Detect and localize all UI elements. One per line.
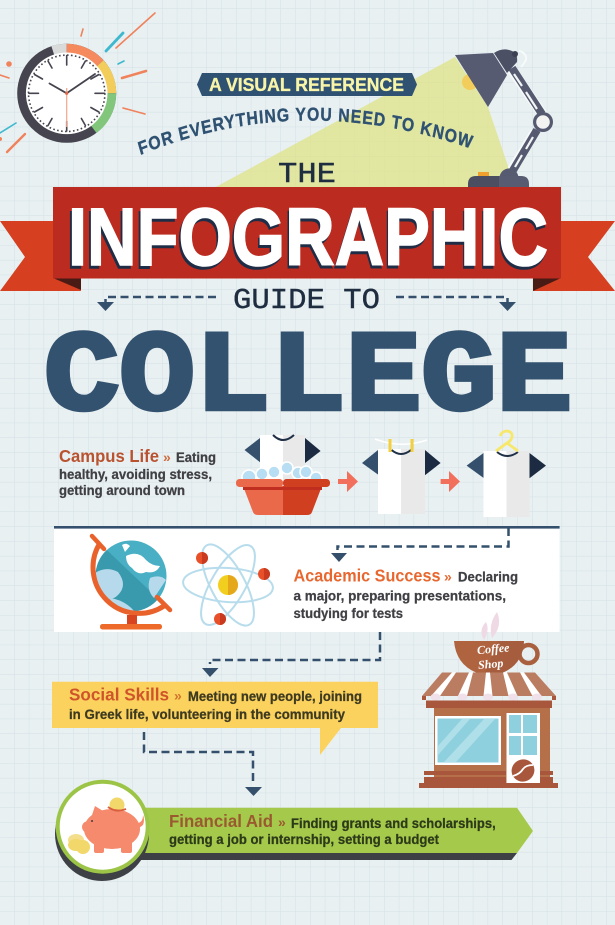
ribbon banner	[0, 187, 615, 291]
pill: a visual reference: A VISUAL REFERENCE	[209, 75, 404, 95]
text: academic success: Academic Success	[294, 566, 441, 586]
panel: social skills callout: »	[174, 688, 182, 704]
text: financial aid	[169, 811, 496, 847]
text: campus life: getting around town	[59, 483, 185, 498]
panel: social skills callout	[52, 682, 378, 755]
arrow: right dashed	[396, 297, 516, 311]
icon: shirt in wash basin	[236, 435, 330, 515]
icon: desk lamp	[455, 49, 553, 188]
panel: social skills callout: Social Skills	[69, 685, 169, 705]
panel: academic success	[54, 526, 560, 633]
heading: college: COLLEGE	[44, 315, 572, 444]
arrow: wash to dry	[338, 471, 358, 492]
text: academic success: »	[444, 568, 452, 584]
arrow: to social skills	[202, 632, 380, 677]
text: campus life: »	[163, 449, 171, 465]
arrow: dry to hanger	[441, 471, 460, 492]
icon: globe	[90, 536, 170, 630]
icon: shirt on hanger	[467, 431, 546, 517]
text: campus life	[59, 446, 216, 498]
text: academic success	[294, 566, 518, 621]
icon: piggy bank	[68, 798, 144, 854]
text: campus life: Campus Life	[59, 446, 159, 466]
panel: social skills callout: in Greek life, volunteering in the community	[69, 707, 345, 722]
text: campus life: healthy, avoiding stress,	[59, 467, 212, 482]
text: financial aid: getting a job or internship, setting a budget	[169, 832, 439, 847]
text: campus life: Eating	[176, 450, 216, 465]
panel: social skills callout: Meeting new people, joining	[188, 689, 362, 704]
icon: coffee shop: Coffee	[476, 640, 511, 657]
icon: coffee shop	[419, 612, 558, 788]
icon: clock	[0, 13, 155, 152]
text: financial aid: Finding grants and scholarships,	[291, 816, 496, 831]
arrow: to financial aid	[144, 732, 262, 796]
curved subtitle: FOR EVERYTHING YOU NEED TO KNOW	[138, 107, 474, 155]
lamp light cone	[214, 57, 510, 188]
arrow: to academic text	[331, 528, 508, 562]
text: academic success: studying for tests	[294, 606, 403, 621]
heading: guide to: GUIDE TO	[233, 284, 380, 317]
arrow: left dashed	[97, 297, 216, 311]
heading: the: THE	[278, 158, 336, 191]
text: financial aid: Financial Aid	[169, 811, 273, 831]
panel: financial aid	[55, 780, 533, 881]
icon: shirt on clothesline	[362, 439, 441, 514]
icon: atom	[182, 537, 274, 633]
text: academic success: a major, preparing presentations,	[294, 588, 506, 604]
text: academic success: Declaring	[458, 570, 518, 584]
text: financial aid: »	[278, 814, 286, 830]
icon: coffee shop: Shop	[477, 656, 504, 672]
